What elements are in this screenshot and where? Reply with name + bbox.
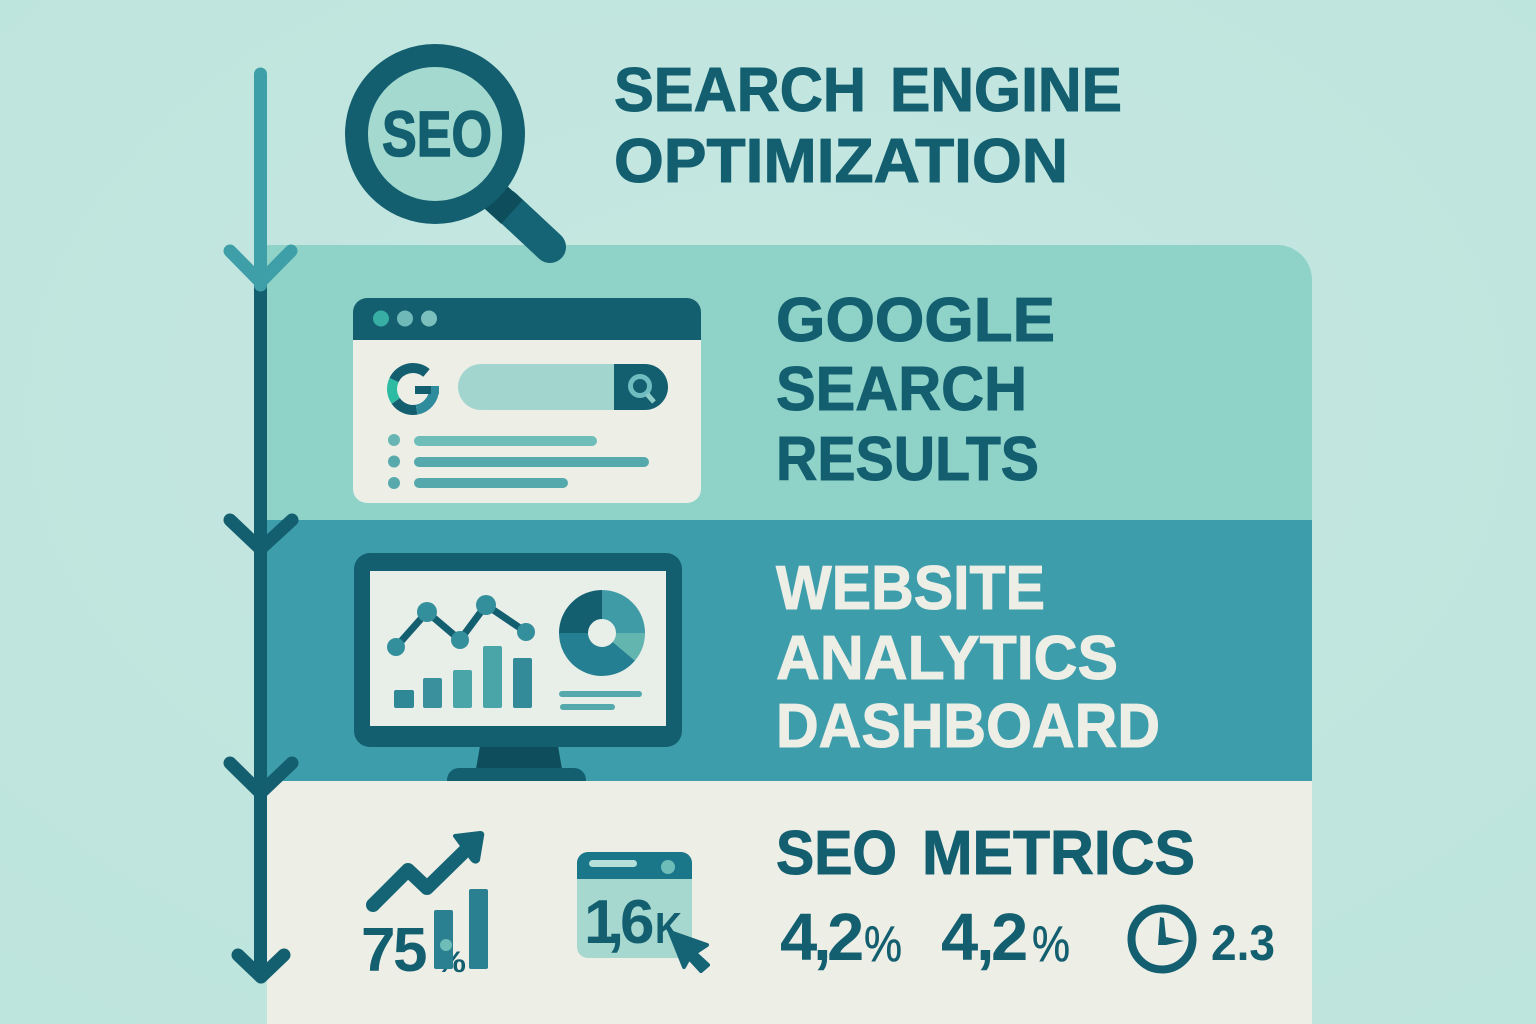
metric: 4,2% second: 4,2 bbox=[941, 900, 1028, 975]
metric: 4,2% first: % bbox=[864, 916, 902, 972]
metric: 75% growth chart: % bbox=[436, 946, 466, 979]
panel: google search results bbox=[267, 245, 1312, 521]
heading: website analytics dashboard: ANALYTICS bbox=[776, 624, 1118, 693]
metric: 1,6K clicks browser: K bbox=[655, 904, 682, 953]
metric: 4,2% second bbox=[941, 900, 1070, 975]
heading: seo metrics: METRICS bbox=[922, 819, 1195, 888]
metric: 4,2% first bbox=[780, 900, 902, 975]
metric: clock 2.3 bbox=[1132, 908, 1275, 971]
title bbox=[614, 56, 1122, 196]
icon: analytics monitor bbox=[354, 553, 682, 781]
heading: google search results bbox=[776, 286, 1055, 494]
heading: seo metrics bbox=[776, 819, 1195, 888]
line chart bbox=[387, 595, 535, 656]
icon: cursor bbox=[670, 932, 708, 971]
donut chart bbox=[574, 604, 630, 661]
heading: website analytics dashboard bbox=[776, 554, 1160, 761]
heading: google search results: SEARCH bbox=[776, 355, 1027, 424]
metric: clock 2.3: 2.3 bbox=[1211, 915, 1275, 971]
title: ENGINE bbox=[890, 56, 1122, 125]
heading: google search results: RESULTS bbox=[776, 425, 1039, 494]
panel: website analytics dashboard bbox=[267, 520, 1312, 781]
metric: 1,6K clicks browser bbox=[577, 852, 708, 971]
metric: 4,2% first: 4,2 bbox=[780, 900, 864, 975]
search bar bbox=[458, 364, 668, 410]
metric: 1,6K clicks browser: 1,6 bbox=[584, 888, 654, 957]
heading: website analytics dashboard: WEBSITE bbox=[776, 554, 1045, 623]
heading: website analytics dashboard: DASHBOARD bbox=[776, 692, 1160, 761]
icon: G logo bbox=[392, 368, 439, 410]
heading: google search results: GOOGLE bbox=[776, 286, 1055, 355]
metric: 75% growth chart: 75 bbox=[361, 916, 427, 985]
title: SEARCH bbox=[614, 56, 866, 125]
icon: magnifying glass with SEO bbox=[356, 56, 550, 247]
result list bbox=[388, 434, 649, 489]
legend lines bbox=[559, 691, 642, 710]
arrow: vertical flow timeline bbox=[230, 74, 292, 977]
metric: 4,2% second: % bbox=[1032, 916, 1070, 972]
metric: 75% growth chart bbox=[361, 833, 488, 985]
title: OPTIMIZATION bbox=[614, 127, 1068, 196]
icon: browser window with Google search bbox=[353, 298, 701, 503]
heading: seo metrics: SEO bbox=[776, 819, 897, 888]
icon: magnifying glass with SEO: SEO bbox=[382, 98, 492, 170]
bar chart bbox=[394, 646, 532, 708]
panel: seo metrics bbox=[267, 781, 1312, 1024]
